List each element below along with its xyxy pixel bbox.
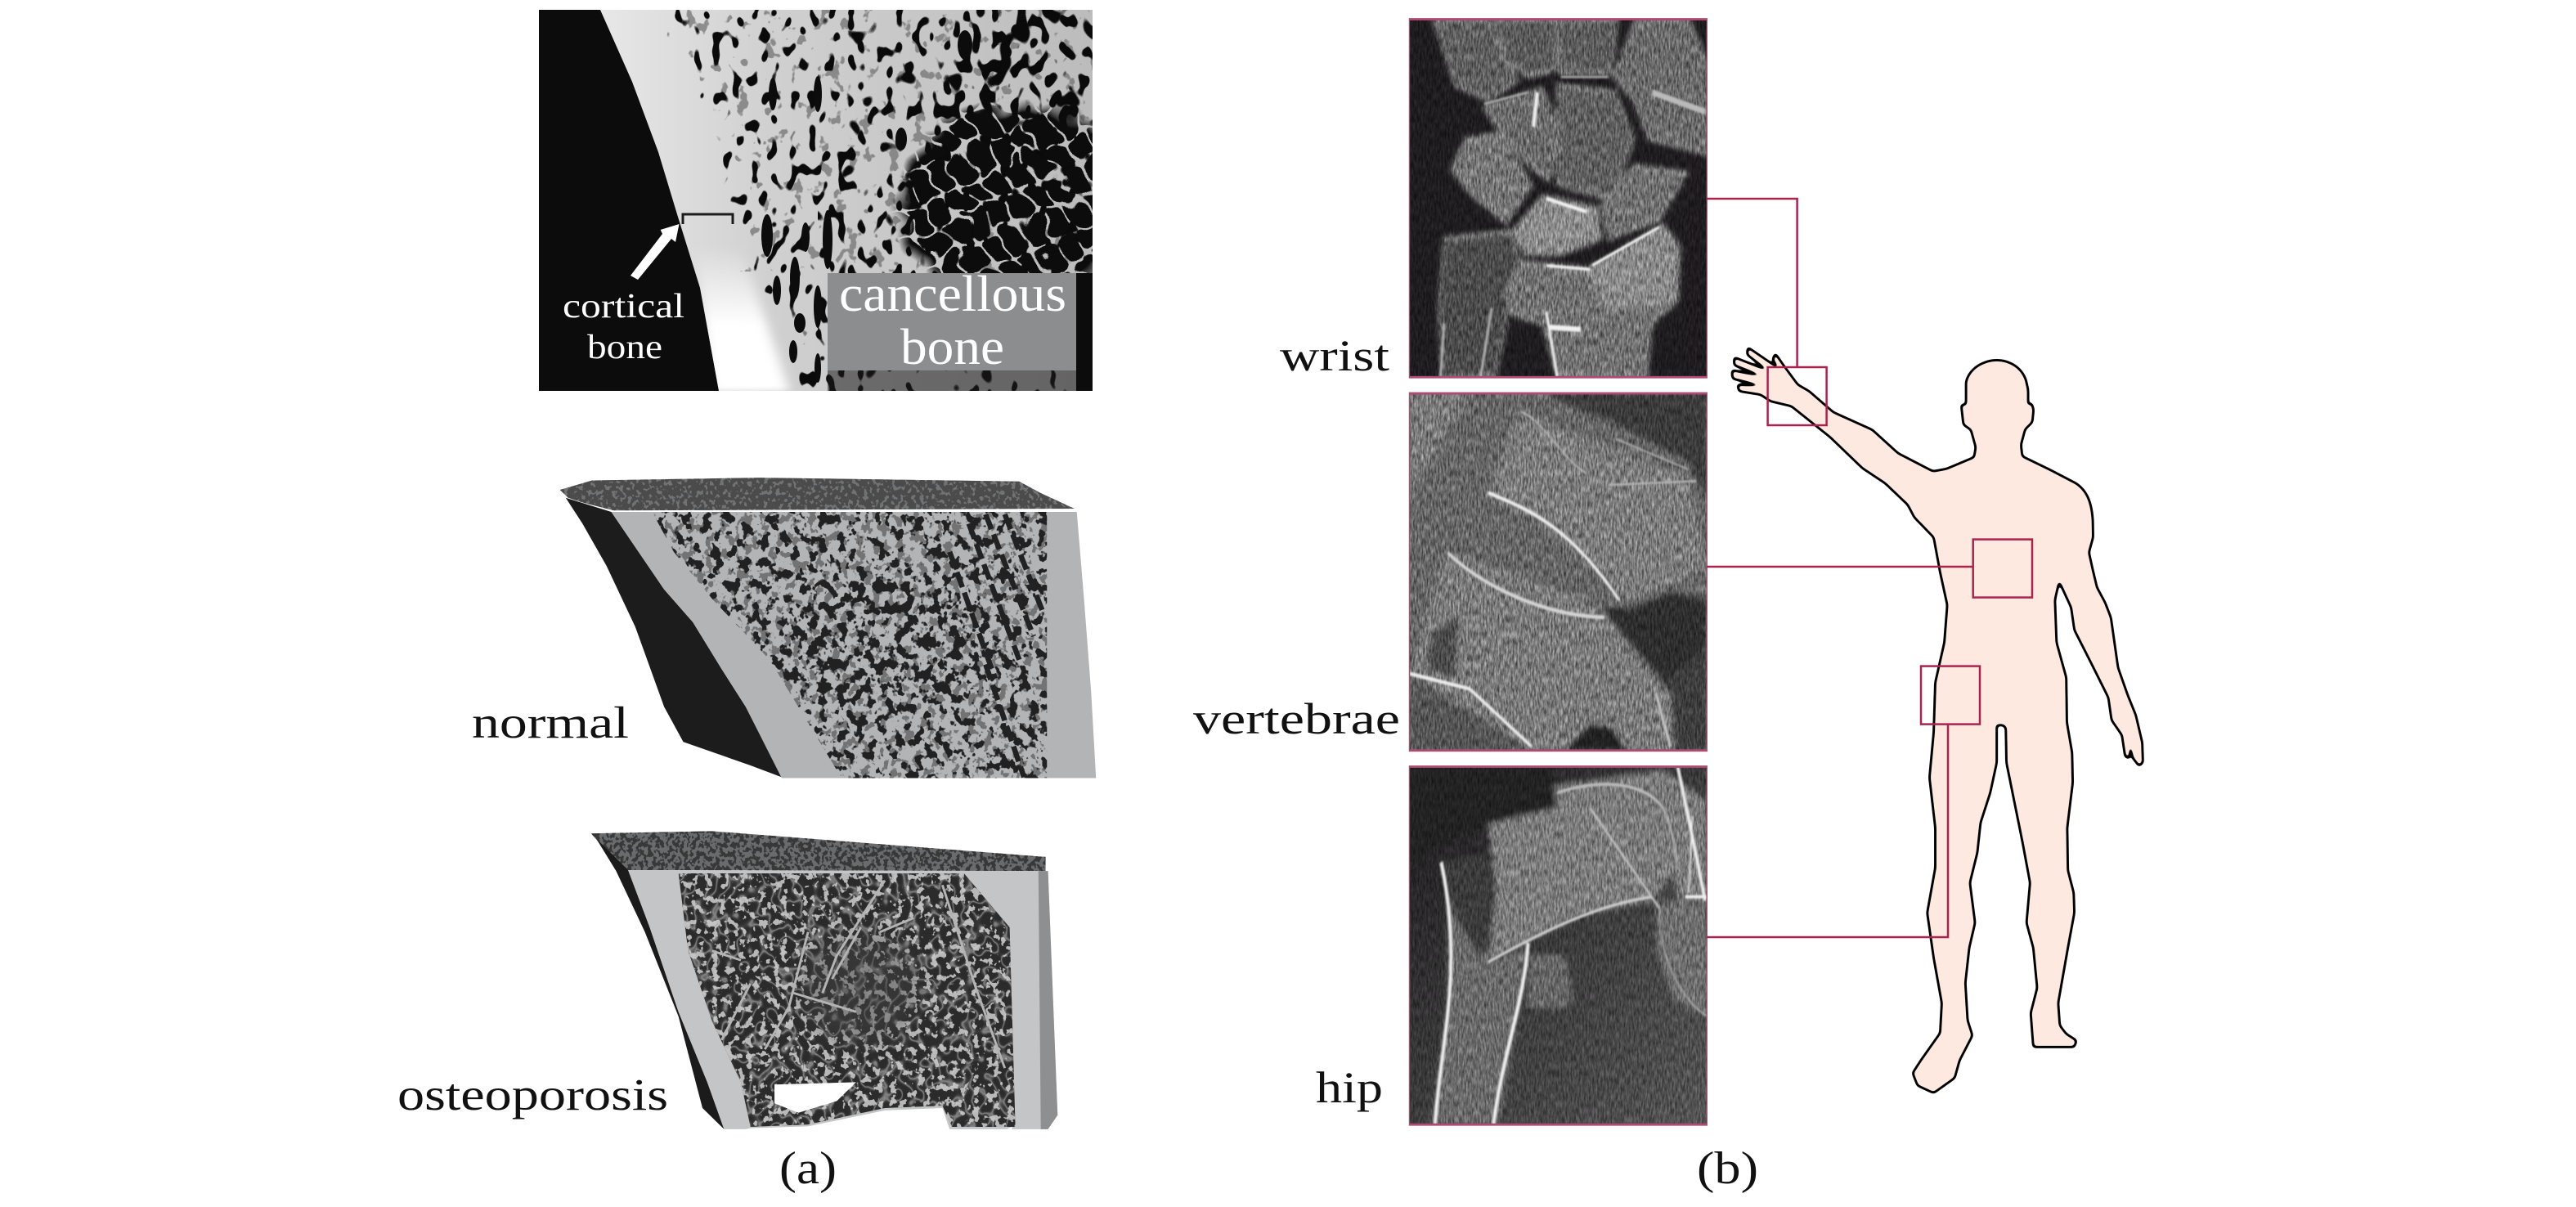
trabecular texture: [649, 509, 1048, 779]
film grain: [1409, 767, 1707, 1124]
film grain: [1409, 393, 1707, 751]
top face: [560, 478, 1075, 510]
figure: bone structure and fracture sites: [399, 10, 2144, 1193]
x-ray: hip: [1409, 767, 1707, 1124]
bracket: cortical thickness: [683, 214, 733, 224]
human body silhouette: [1732, 347, 2143, 1093]
frame: [1409, 393, 1707, 751]
label: wrist: wrist: [1280, 331, 1389, 380]
white void at base: [774, 1082, 856, 1113]
3D bone render: normal: [559, 477, 1096, 779]
micrograph background: [539, 10, 1093, 391]
wrist bones: [1433, 20, 1707, 377]
black outer side: [596, 838, 724, 1129]
wrist film base: [1409, 20, 1707, 377]
film grain: [1409, 20, 1707, 377]
frame: [1409, 20, 1707, 377]
label box: cancellous bone: cancellous: [839, 267, 1066, 322]
caption a: (a): [779, 1143, 837, 1194]
label: vertebrae: vertebrae: [1193, 694, 1400, 743]
diagonal dark striations: [949, 514, 1043, 777]
vertebrae film base: [1409, 393, 1707, 751]
arrow: points to cortical bone: [631, 224, 679, 280]
connector and marker: wrist: [1707, 199, 1827, 425]
frame: [1409, 767, 1707, 1124]
label box: cancellous bone: [828, 267, 1076, 375]
label: cortical bone: [563, 288, 684, 366]
3D bone render: osteoporosis: [590, 828, 1057, 1134]
vertebrae tonal regions: [1409, 393, 1707, 751]
bone tissue: [597, 0, 1120, 391]
caption b: (b): [1697, 1143, 1758, 1194]
label: osteoporosis: osteoporosis: [397, 1070, 668, 1120]
label: cortical bone: cortical: [563, 288, 684, 325]
connector and marker: hip: [1707, 666, 1980, 937]
light cut face: [628, 870, 1057, 1129]
x-ray: wrist: [1409, 20, 1707, 377]
label box: cancellous bone: bone: [900, 320, 1004, 375]
dense osteoporotic texture: [676, 871, 1016, 1129]
x-ray: vertebrae: [1409, 393, 1707, 751]
black outer side: [566, 498, 782, 777]
elongated pores: [761, 30, 972, 383]
label: hip: hip: [1316, 1063, 1383, 1112]
vertebrae highlights: [1409, 412, 1696, 747]
label: cortical bone: bone: [587, 329, 662, 366]
hip film base: [1409, 767, 1707, 1124]
wrist highlights: [1440, 77, 1705, 377]
darker side strip: [1039, 871, 1057, 1129]
panel a: cortical and cancellous bone micrograph: [539, 0, 1120, 391]
connector and marker: vertebrae: [1707, 540, 2032, 598]
hip highlights: [1435, 767, 1707, 1124]
label: normal: normal: [472, 698, 629, 747]
hip tonal regions: [1409, 767, 1707, 1124]
top face: [591, 831, 1046, 871]
light cut face: [612, 512, 1096, 778]
large trabecular cells: [890, 98, 1093, 273]
